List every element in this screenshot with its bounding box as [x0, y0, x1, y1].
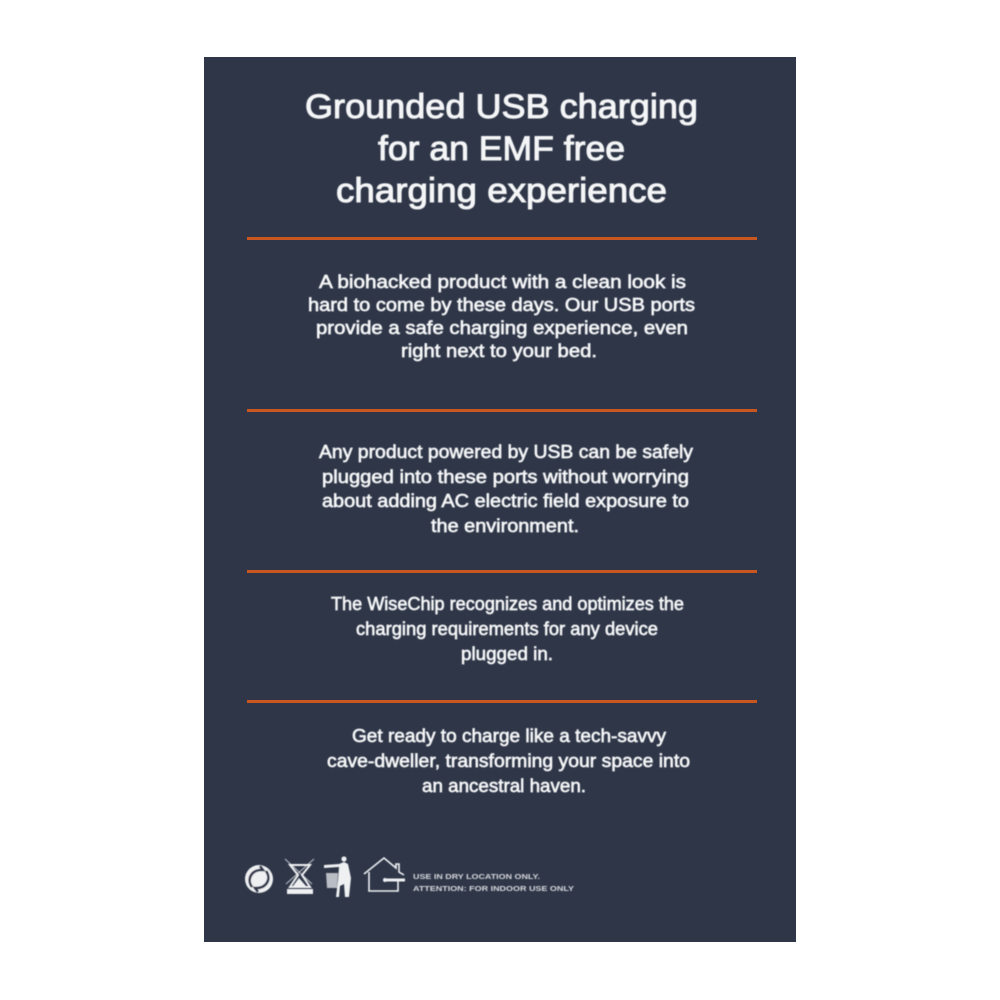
icon: person discarding into bin: [324, 856, 351, 897]
text block: biohacked product: right next to your bed.: [401, 341, 597, 361]
icon: crossed-out hourglass: [285, 859, 314, 894]
text block: usage notice: ATTENTION: FOR INDOOR USE ONLY: [413, 884, 574, 893]
text block: biohacked product: [308, 272, 695, 361]
text block: biohacked product: A biohacked product with a clean look is: [319, 272, 686, 292]
icon: indoor house: [364, 858, 405, 891]
title: charging experience: [336, 172, 667, 210]
text block: WiseChip: charging requirements for any device: [356, 619, 658, 639]
text block: USB powered products: the environment.: [431, 516, 579, 536]
text block: call to action: [327, 726, 690, 796]
text block: USB powered products: about adding AC electric field exposure to: [322, 491, 689, 511]
title: for an EMF free: [378, 130, 625, 168]
text block: USB powered products: Any product powered by USB can be safely: [319, 442, 693, 462]
text block: usage notice: [413, 872, 574, 893]
text block: WiseChip: plugged in.: [461, 644, 553, 664]
panel: background card: [204, 57, 796, 942]
text block: call to action: Get ready to charge like a tech-savvy: [352, 726, 666, 746]
text block: usage notice: USE IN DRY LOCATION ONLY.: [413, 872, 540, 881]
text block: call to action: cave-dweller, transforming your space into: [327, 751, 690, 771]
text block: USB powered products: [319, 442, 693, 536]
text block: USB powered products: plugged into these ports without worrying: [322, 467, 689, 487]
title: Grounded USB charging: [305, 88, 698, 126]
icon: green dot recycling: [245, 865, 273, 893]
text block: call to action: an ancestral haven.: [422, 776, 586, 796]
text block: WiseChip: [331, 594, 684, 664]
text block: biohacked product: provide a safe charging experience, even: [316, 318, 688, 338]
text block: WiseChip: The WiseChip recognizes and optimizes the: [331, 594, 684, 614]
title: [305, 88, 698, 210]
text block: biohacked product: hard to come by these days. Our USB ports: [308, 295, 695, 315]
